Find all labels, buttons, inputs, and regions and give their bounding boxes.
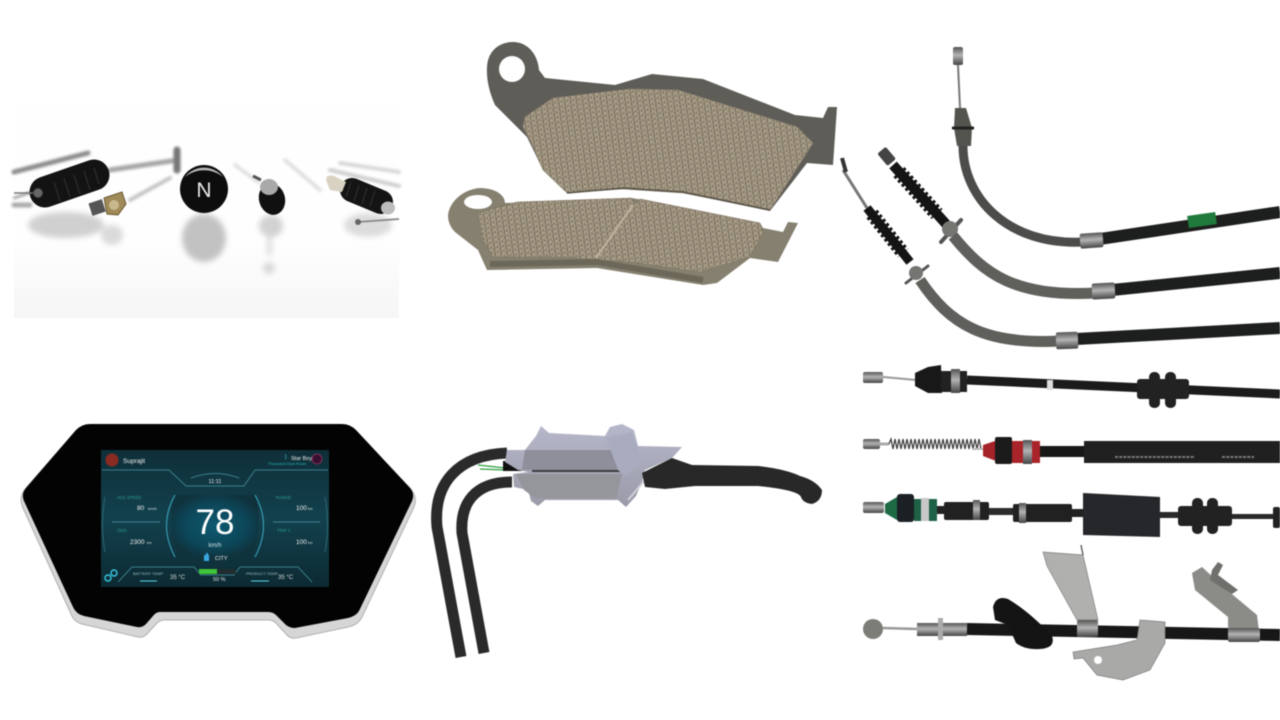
actuator box: [505, 424, 682, 507]
cable 3 with bellows: [842, 158, 1280, 349]
left readouts: ODO: [117, 528, 127, 533]
temperature labels: 35 °C: [170, 575, 186, 581]
panel: control cable ends photo: [14, 65, 399, 318]
panel: straight cable assemblies: [863, 365, 1280, 680]
blurred background cables: [14, 150, 399, 205]
cable with spring and red connector: [863, 437, 1280, 464]
right readouts: 100: [296, 539, 307, 546]
reflections: [28, 212, 392, 274]
connector: [503, 461, 525, 471]
panel: lever and actuator assembly: [437, 424, 822, 657]
right readouts: RANGE: [276, 495, 291, 500]
top header lines: [102, 470, 328, 522]
left rubber boot: [14, 168, 99, 201]
right readouts: TRIP A: [277, 528, 291, 533]
lever handle: [642, 458, 822, 504]
brand: Suprajit: [123, 458, 145, 465]
left readouts: AVG SPEED: [117, 495, 142, 500]
left readouts: km: [147, 541, 152, 545]
cluster housing: [21, 424, 415, 638]
N knob: [180, 165, 228, 213]
cable with green connector and damper: [863, 493, 1280, 537]
brand: [106, 454, 145, 466]
media status: Thousand Dust Road: [268, 461, 306, 466]
left readouts: 80: [137, 505, 145, 512]
centre cable end: [253, 176, 289, 218]
temperature labels: 35 °C: [278, 575, 294, 581]
clock: 11:11: [209, 479, 221, 485]
panel: brake pads: [448, 42, 837, 285]
upper brake pad: [487, 42, 837, 211]
right readouts: km: [308, 541, 313, 545]
ride mode: CITY: [215, 556, 228, 562]
speed dial: km/h: [208, 543, 222, 549]
left readouts: 2300: [130, 539, 145, 546]
cable with boot: [863, 365, 1280, 408]
media status: Star Boy: [291, 456, 312, 462]
speed dial: 78: [196, 503, 234, 542]
display screen: [101, 450, 329, 587]
cable 2 with bellows: [877, 147, 1280, 300]
panel: three curved control cables: [842, 47, 1280, 349]
media status: [268, 454, 322, 466]
left readouts: km/h: [148, 506, 157, 511]
cable 1 with green band: [952, 47, 1280, 249]
right readouts: 100: [296, 505, 307, 512]
bottom gauges: [118, 567, 312, 582]
speed dial: [102, 495, 328, 557]
lower brake pad: [448, 188, 798, 285]
green wires: [478, 465, 505, 470]
temperature labels: BATTERY TEMP: [133, 571, 163, 576]
brass ferrule: [88, 192, 126, 216]
hose cables: [437, 453, 512, 657]
N knob: N: [196, 179, 212, 202]
ride mode: [204, 553, 228, 562]
temperature labels: [133, 571, 294, 581]
right readouts: km: [308, 507, 313, 511]
cable with metal brackets and grommet: [863, 545, 1280, 680]
right rubber boot: [326, 176, 399, 225]
left readouts: [117, 495, 157, 546]
battery bar: [199, 569, 236, 583]
icon: connection: [105, 570, 117, 581]
media status: ᛒ: [284, 454, 288, 461]
right readouts: [276, 495, 313, 546]
panel: digital instrument cluster: [21, 424, 415, 638]
temperature labels: PRODUCT TEMP: [246, 571, 278, 576]
battery bar: 50 %: [213, 577, 226, 583]
